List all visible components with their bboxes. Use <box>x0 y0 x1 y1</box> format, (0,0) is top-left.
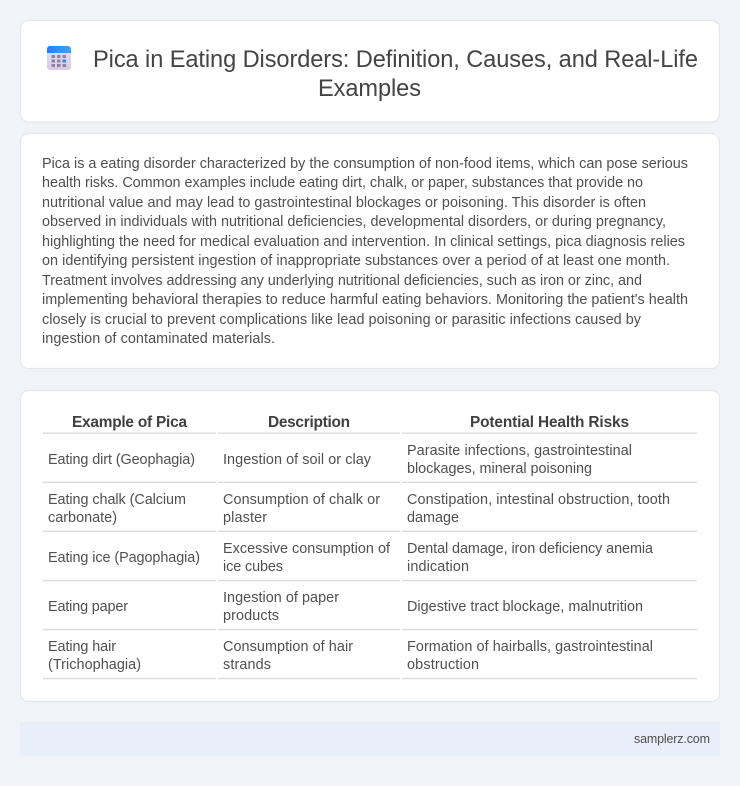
row: eating hair: obstruction <box>407 657 479 673</box>
row: eating chalk: Consumption of chalk or <box>223 492 380 508</box>
row: eating ice: Dental damage, iron deficiency anemia <box>407 541 653 557</box>
row: eating hair: strands <box>223 657 271 673</box>
panel: title header <box>20 20 720 122</box>
footer <box>20 722 720 756</box>
row: eating ice: Excessive consumption of <box>223 541 391 557</box>
row: eating chalk: plaster <box>223 510 267 526</box>
text block: pica overview: nutritional value and may lead to gastrointestinal blockages or poisoning. This disorder is often <box>42 195 646 211</box>
panel: examples table <box>20 390 720 702</box>
row: eating hair <box>43 639 697 679</box>
panel: description <box>20 134 720 368</box>
row: eating dirt: Ingestion of soil or clay <box>223 452 372 468</box>
text block: pica overview: on identifying persistent ingestion of inappropriate substances over a period of at least one month. <box>42 253 670 269</box>
table header: Potential Health Risks <box>470 414 629 431</box>
footer: samplerz.com <box>634 732 710 746</box>
row: eating chalk: carbonate) <box>48 510 117 526</box>
row: eating chalk: Constipation, intestinal obstruction, tooth <box>407 492 670 508</box>
row: eating hair: Formation of hairballs, gastrointestinal <box>407 639 653 655</box>
text block: pica overview: ingestion of contaminated materials. <box>42 331 275 347</box>
text block: pica overview: closely is crucial to prevent complications like lead poisoning or parasitic infections caused by <box>42 312 642 328</box>
row: eating paper <box>43 590 697 630</box>
row: eating ice: indication <box>407 559 469 575</box>
table header: Example of Pica <box>72 414 187 431</box>
text block: pica overview: observed in individuals with nutritional deficiencies, developmental disorders, or during pregnancy, <box>42 214 666 230</box>
row: eating hair: (Trichophagia) <box>48 657 141 673</box>
title <box>93 47 698 102</box>
table header: Description <box>268 414 350 431</box>
row: eating hair: Consumption of hair <box>223 639 353 655</box>
row: eating dirt: blockages, mineral poisoning <box>407 461 592 477</box>
row: eating ice <box>43 541 697 581</box>
row: eating paper: products <box>223 608 279 624</box>
row: eating paper: Ingestion of paper <box>223 590 339 606</box>
row: eating hair: Eating hair <box>48 639 116 655</box>
row: eating ice: Eating ice (Pagophagia) <box>48 550 200 566</box>
title: Pica in Eating Disorders: Definition, Causes, and Real-Life <box>93 47 698 73</box>
icon: calendar <box>47 46 71 70</box>
row: eating chalk <box>43 492 697 532</box>
row: eating dirt: Eating dirt (Geophagia) <box>48 452 195 468</box>
text block: pica overview: highlighting the need for medical evaluation and intervention. In clinical settings, pica diagnosis relies <box>42 234 685 250</box>
text block: pica overview: Pica is a eating disorder characterized by the consumption of non-food items, which can pose serious <box>42 156 688 172</box>
row: eating paper: Eating paper <box>48 599 128 615</box>
text block: pica overview: health risks. Common examples include eating dirt, chalk, or paper, substances that provide no <box>42 175 643 191</box>
row: eating paper: Digestive tract blockage, malnutrition <box>407 599 643 615</box>
row: eating dirt: Parasite infections, gastrointestinal <box>407 443 632 459</box>
text block: pica overview: Treatment involves addressing any underlying nutritional deficiencies, such as iron or zinc, and <box>42 273 642 289</box>
text block: pica overview <box>42 156 688 347</box>
title: Examples <box>318 76 421 102</box>
text block: pica overview: implementing behavioral therapies to reduce harmful eating behaviors. Monitoring the patient's health <box>42 292 688 308</box>
table header <box>43 414 697 434</box>
row: eating ice: ice cubes <box>223 559 283 575</box>
row: eating chalk: Eating chalk (Calcium <box>48 492 186 508</box>
row: eating dirt <box>43 443 697 483</box>
row: eating chalk: damage <box>407 510 459 526</box>
